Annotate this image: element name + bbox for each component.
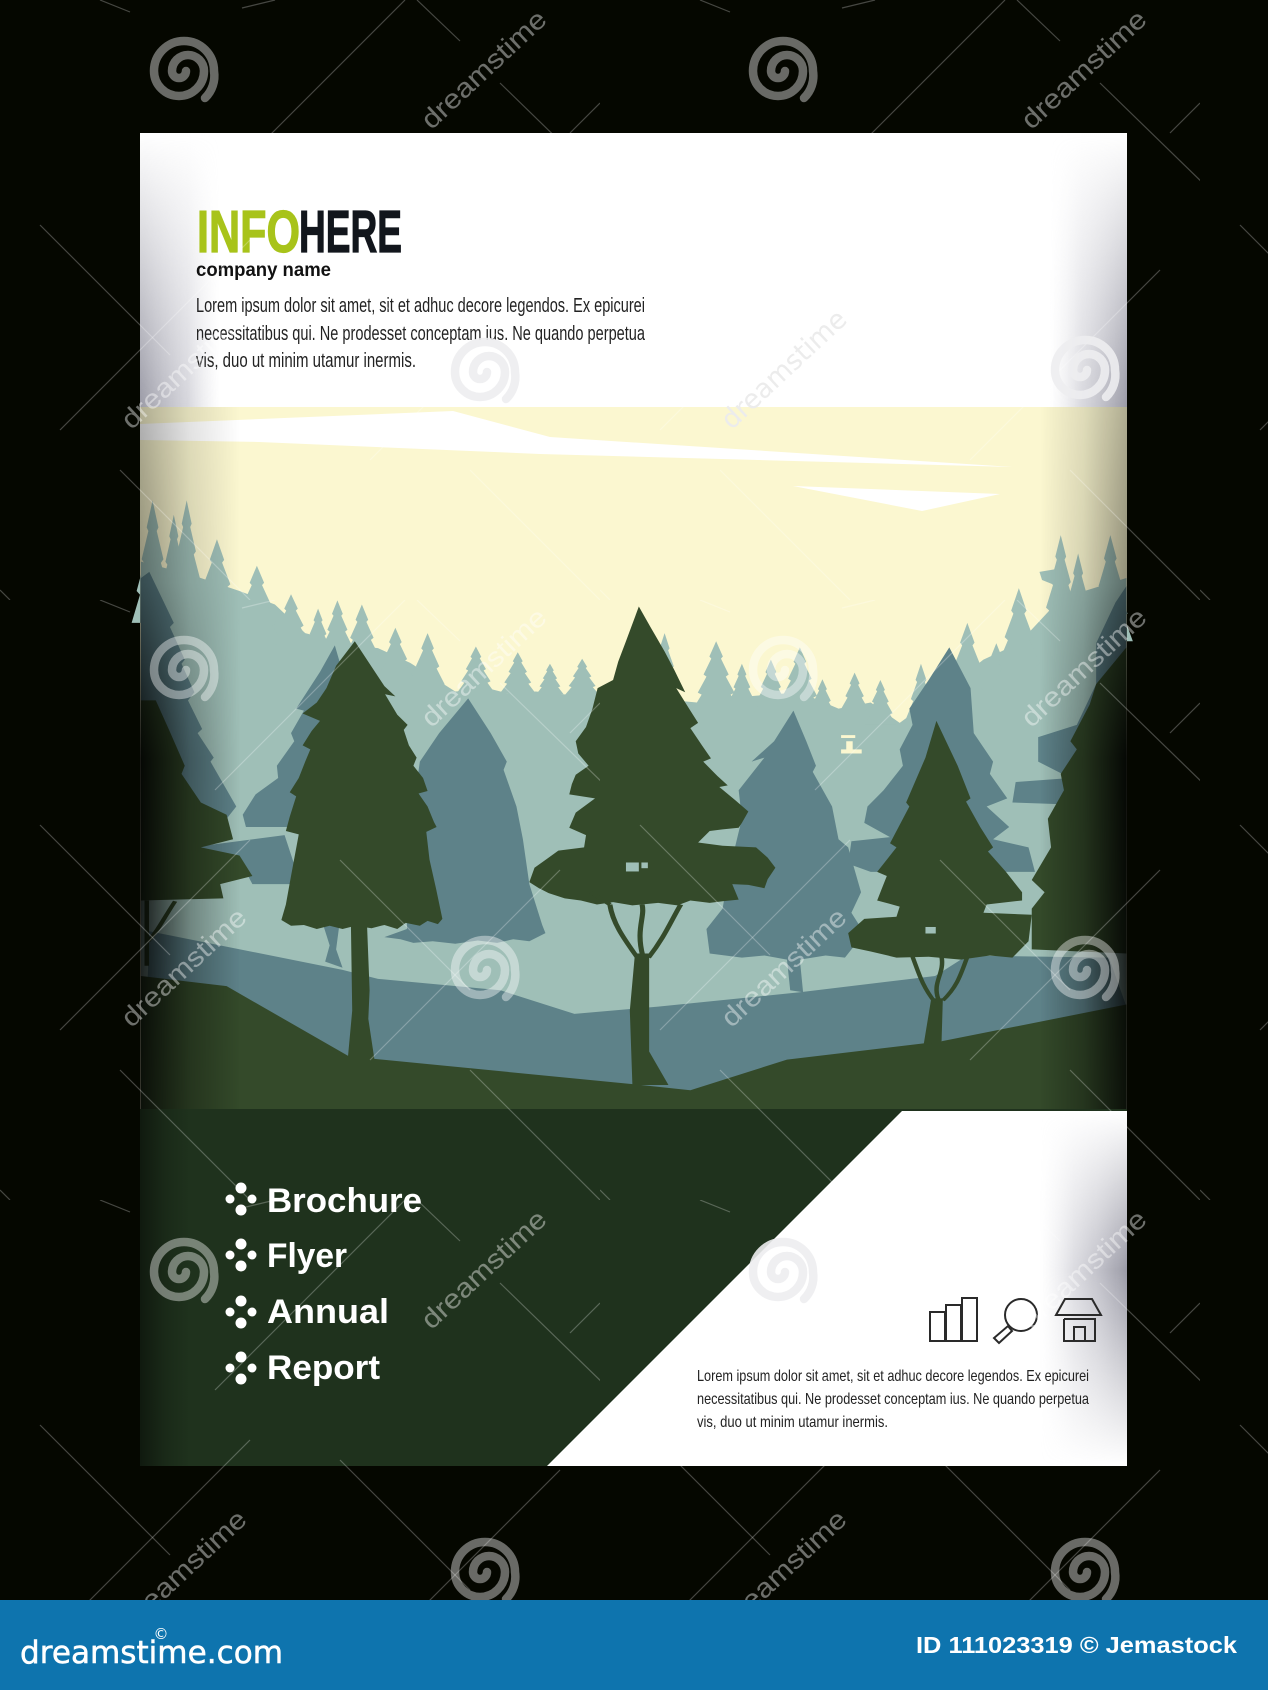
panel: white header area [140, 133, 1127, 408]
footer logo: dreamstime.com [20, 1635, 283, 1671]
panel: forest scene sky [140, 407, 1127, 1109]
watermark: dreamstime wordmarks: dreamstime [415, 1204, 553, 1335]
watermark: dreamstime wordmarks: dreamstime [415, 4, 553, 135]
footer bar [0, 1600, 1268, 1690]
title: HERE [299, 199, 402, 265]
illustration: forest in scaled coordinates [132, 500, 1133, 1111]
tree: left edge pine [141, 700, 252, 966]
watermark: faint wordmark on header: dreamstime [715, 304, 853, 436]
tree: right foreground pine [848, 721, 1032, 1045]
header right shading [1060, 156, 1127, 407]
corner paragraph [697, 1368, 1089, 1431]
title [197, 199, 402, 265]
corner right shading [1051, 1124, 1127, 1450]
far forest tree line [132, 500, 1133, 1051]
dark panel left shading [140, 1109, 190, 1466]
watermark: dreamstime wordmarks: dreamstime [415, 602, 553, 733]
list item: Report: Report [267, 1349, 380, 1387]
icon: house [1056, 1299, 1101, 1341]
header left shading [140, 156, 211, 407]
watermark: spirals [154, 41, 1115, 1599]
icon: magnifier [994, 1299, 1037, 1343]
list: brochure types [226, 1182, 422, 1387]
corner paragraph: necessitatibus qui. Ne prodesset conceptam ius. Ne quando perpetua [697, 1391, 1089, 1408]
watermark: spirals on white areas [455, 340, 1115, 1299]
cloud: long upper cloud [140, 411, 1013, 467]
watermark: dreamstime wordmarks: dreamstime [715, 902, 853, 1033]
list item: Brochure: Brochure [267, 1182, 422, 1220]
corner paragraph: vis, duo ut minim utamur inermis. [697, 1414, 888, 1431]
dark foreground ground [141, 976, 1126, 1111]
watermark: dreamstime wordmarks [115, 4, 1153, 1635]
company name: company name [196, 260, 331, 281]
mid-tone trees [141, 572, 1126, 992]
tree: right edge pine [1032, 647, 1126, 954]
list item: Flyer [226, 1237, 347, 1275]
tree: center foreground pine [529, 607, 775, 1085]
header paragraph: Lorem ipsum dolor sit amet, sit et adhuc decore legendos. Ex epicurei [196, 295, 645, 317]
watermark: dreamstime wordmarks: dreamstime [1015, 602, 1153, 733]
title: INFO [197, 199, 300, 265]
watermark: dreamstime wordmarks: dreamstime [115, 902, 253, 1033]
panel: white diagonal corner [547, 1111, 1127, 1466]
watermark: dreamstime wordmarks: dreamstime [715, 1504, 853, 1635]
tree: left foreground pine [281, 641, 442, 1062]
scene right shading [1040, 407, 1127, 1109]
watermark: dreamstime wordmarks: dreamstime [1015, 4, 1153, 135]
scene left shading [140, 407, 240, 1109]
header paragraph: necessitatibus qui. Ne prodesset conceptam ius. Ne quando perpetua [196, 323, 646, 345]
watermark: dreamstime wordmarks: dreamstime [115, 1504, 253, 1635]
footer image id: ID 111023319 © Jemastock [916, 1632, 1237, 1658]
footer logo: © [154, 1625, 168, 1643]
cloud: small right cloud [793, 486, 1000, 511]
corner paragraph: Lorem ipsum dolor sit amet, sit et adhuc decore legendos. Ex epicurei [697, 1368, 1089, 1385]
header paragraph: vis, duo ut minim utamur inermis. [196, 350, 416, 372]
header paragraph [196, 295, 646, 372]
list item: Flyer: Flyer [267, 1237, 347, 1275]
panel: dark green lower section [140, 1109, 1127, 1466]
list item: Annual: Annual [267, 1293, 389, 1331]
icon: bar chart [930, 1298, 977, 1341]
watermark: dreamstime wordmarks: dreamstime [1015, 1204, 1153, 1335]
mid-tone ground ridge [141, 931, 1126, 1109]
watermark: dreamstime wordmarks: dreamstime [115, 304, 253, 435]
